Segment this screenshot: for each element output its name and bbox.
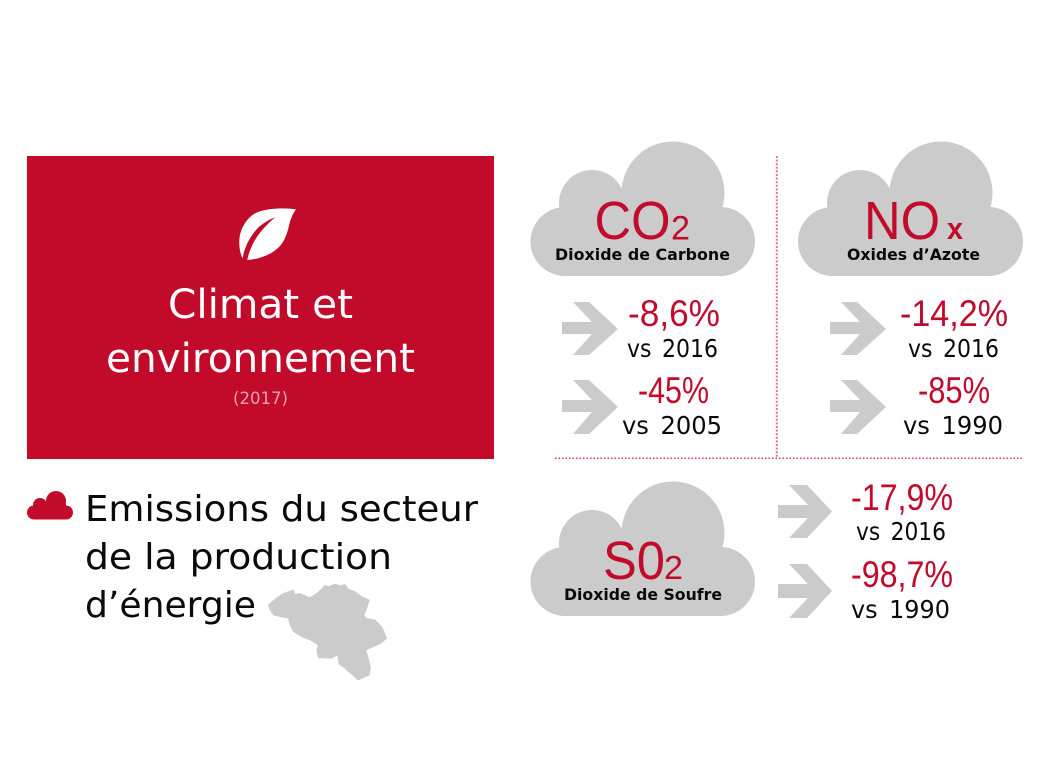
- arrow: [830, 302, 886, 355]
- title: [106, 282, 415, 382]
- caption: dioxide de carbone: Dioxide de Carbone: [555, 245, 730, 264]
- label: NOx: x: [947, 211, 964, 246]
- stat: vs 1990: [851, 595, 950, 624]
- stat: -85%: [918, 370, 990, 411]
- label: S02: 2: [664, 549, 683, 586]
- stat: -98,7%: [851, 554, 953, 595]
- panel: NOx: [798, 142, 1023, 440]
- caption: dioxide de soufre: Dioxide de Soufre: [564, 585, 722, 604]
- stat: [627, 293, 720, 363]
- arrow: [562, 302, 618, 355]
- heading text: de la production: [85, 537, 392, 578]
- panel: climate title: [27, 156, 494, 459]
- cloud: NOx: [798, 142, 1023, 276]
- title: environnement: [106, 336, 415, 382]
- arrow: [778, 564, 832, 618]
- year: (2017): [233, 389, 288, 408]
- stat: [900, 293, 1008, 363]
- stat: vs 2016: [627, 334, 718, 363]
- map: Belgium: [268, 584, 387, 680]
- panel: SO2: [530, 477, 953, 624]
- arrow: [562, 380, 618, 434]
- stat: -17,9%: [851, 477, 953, 518]
- panel: CO2: [530, 142, 755, 440]
- label: CO2: 2: [671, 210, 690, 248]
- arrow: [778, 485, 832, 538]
- label: NOx: NO: [864, 191, 940, 251]
- heading text: Emissions du secteur: [85, 489, 478, 530]
- title: Climat et: [168, 282, 353, 328]
- stat: -8,6%: [628, 293, 720, 334]
- stat: -45%: [638, 370, 709, 411]
- stat: vs 2016: [856, 517, 946, 546]
- heading text: d’énergie: [85, 585, 256, 626]
- cloud: SO2: [530, 482, 755, 616]
- heading text: [85, 489, 478, 626]
- arrow: [830, 380, 886, 434]
- caption: oxides d'azote: Oxides d’Azote: [847, 245, 980, 264]
- stat: [851, 477, 953, 546]
- stat: [622, 370, 722, 440]
- icon: leaf: [239, 208, 296, 260]
- label: CO2: CO: [594, 191, 670, 251]
- heading: emissions: [27, 489, 478, 626]
- stat: [851, 554, 953, 624]
- stat: vs 2016: [908, 334, 999, 363]
- stat: vs 2005: [622, 411, 722, 440]
- icon: red cloud: [27, 491, 73, 520]
- stat: vs 1990: [903, 411, 1003, 440]
- stat: -14,2%: [900, 293, 1008, 334]
- cloud: CO2: [530, 142, 755, 276]
- stat: [903, 370, 1003, 440]
- label: S02: S0: [603, 531, 665, 591]
